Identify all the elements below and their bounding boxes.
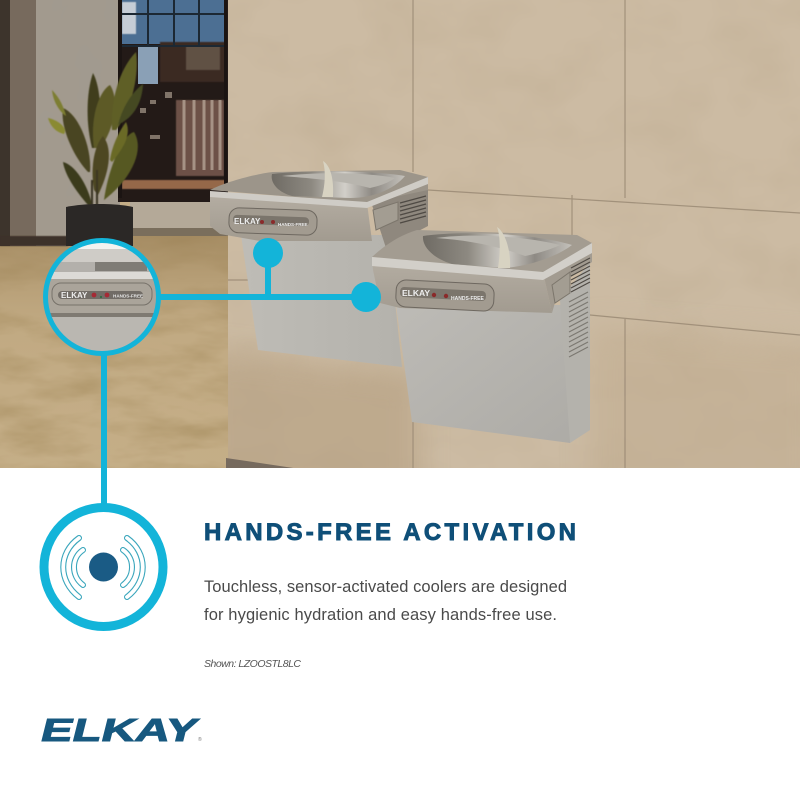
logo: Elkay: ELKAY <box>37 712 203 748</box>
logo: Elkay <box>37 712 203 748</box>
stone wall tiles <box>226 0 800 468</box>
lower sensor panel <box>395 279 495 312</box>
hotspot: upper fountain <box>253 238 283 268</box>
icon: hands-free sensor <box>44 508 163 626</box>
room background <box>0 0 230 468</box>
upper drinking fountain <box>210 161 428 367</box>
photo: drinking fountains in lobby <box>0 0 800 500</box>
hotspot: lower fountain <box>351 282 381 312</box>
lower sensor panel: HANDS-FREE <box>451 296 484 302</box>
heading: HANDS-FREE ACTIVATION <box>204 519 576 546</box>
logo: Elkay: ® <box>198 736 202 743</box>
magnified sensor detail <box>40 238 164 359</box>
window with city view <box>122 0 224 190</box>
upper sensor panel: ELKAY <box>234 217 261 226</box>
description text: for hygienic hydration and easy hands-free use. <box>204 606 557 624</box>
lower sensor panel: ELKAY <box>402 288 430 298</box>
callout connector lines <box>104 253 366 506</box>
upper sensor panel: HANDS-FREE <box>278 222 308 227</box>
model note: Shown: LZOOSTL8LC <box>204 658 301 670</box>
description text: Touchless, sensor-activated coolers are designed <box>204 578 567 596</box>
sensor label pill <box>52 283 152 305</box>
potted plant <box>48 52 143 246</box>
sensor label pill: ELKAY <box>61 291 88 300</box>
upper sensor panel <box>229 207 317 236</box>
description text <box>204 578 567 624</box>
lower drinking fountain <box>372 227 592 443</box>
sensor label pill: HANDS-FREE <box>113 294 143 298</box>
